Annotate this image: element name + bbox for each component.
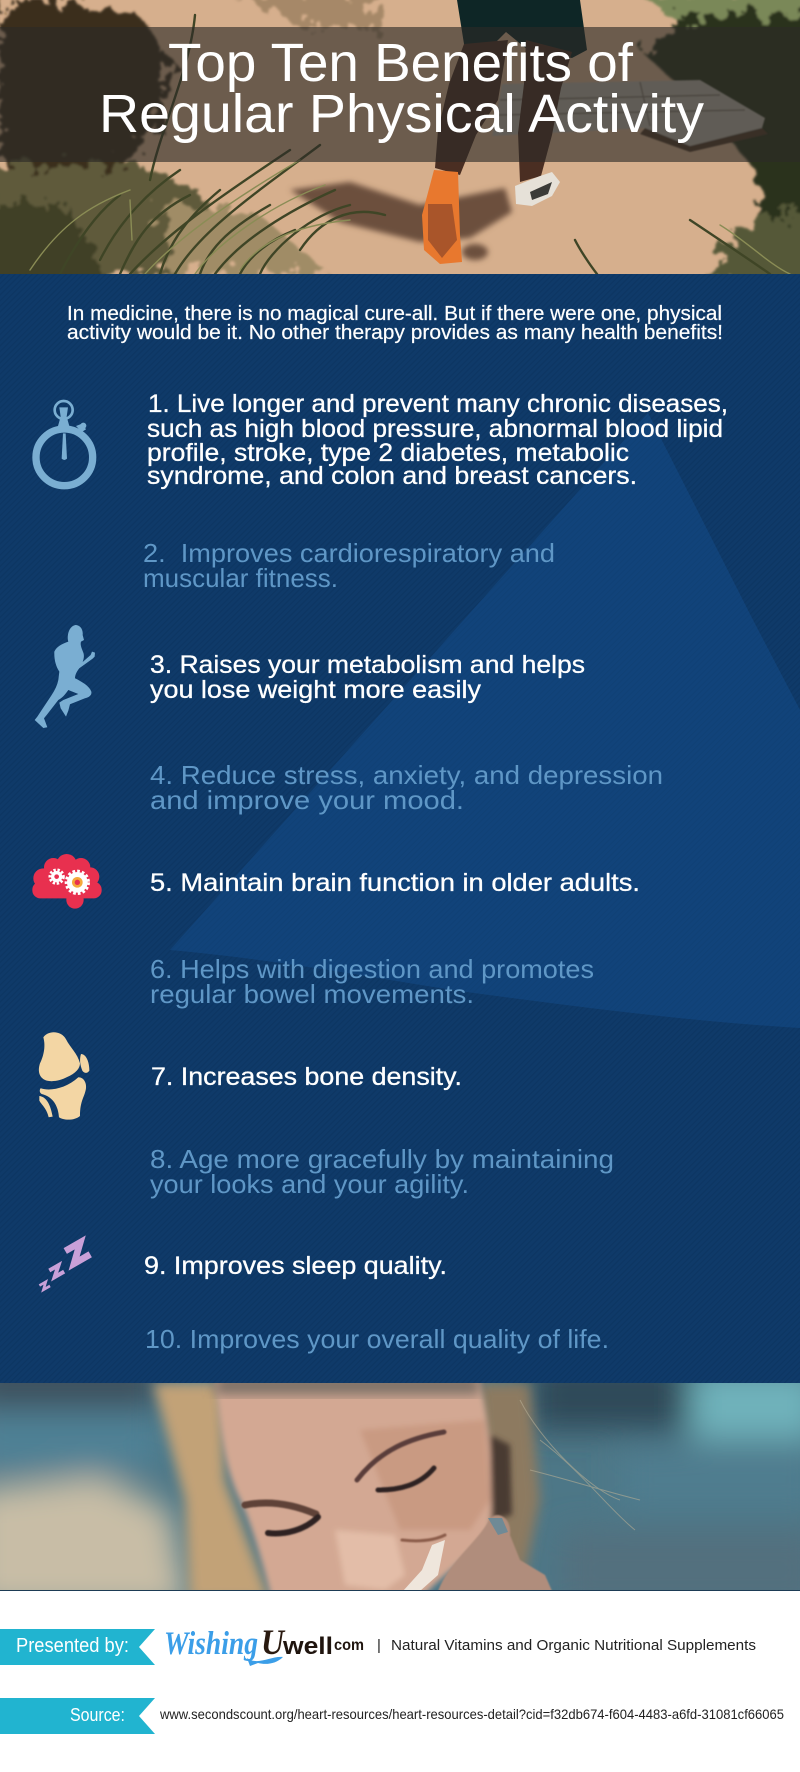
grass blades	[30, 15, 790, 274]
panel: blue benefits panel	[0, 274, 800, 1383]
benefit 1: such as high blood pressure, abnormal blood lipid	[147, 415, 723, 443]
ribbon: presented by	[0, 1629, 155, 1665]
icon: sleep zzz	[39, 1241, 90, 1290]
benefit 3: you lose weight more easily	[150, 676, 482, 704]
benefit 6: 6. Helps with digestion and promotes	[150, 954, 594, 984]
benefit 5: 5. Maintain brain function in older adults.	[150, 869, 640, 897]
logo: WishingUwell.com: com	[334, 1637, 364, 1654]
benefit 1: 1. Live longer and prevent many chronic diseases,	[148, 390, 728, 418]
benefit 4: 4. Reduce stress, anxiety, and depression	[150, 760, 663, 790]
intro text: activity would be it. No other therapy provides as many health benefits!	[67, 322, 723, 344]
benefit 10: 10. Improves your overall quality of life.	[145, 1324, 609, 1354]
tagline: |	[377, 1637, 381, 1654]
tagline: Natural Vitamins and Organic Nutritional Supplements	[391, 1637, 756, 1654]
hero photo: runner on sandy path	[0, 0, 800, 290]
benefit 6	[150, 954, 594, 1009]
background triangle shape	[170, 413, 800, 1028]
ribbon: source	[0, 1698, 155, 1734]
benefit 3: 3. Raises your metabolism and helps	[150, 651, 585, 679]
icon: knee joint	[39, 1032, 89, 1120]
benefit 9: 9. Improves sleep quality.	[144, 1252, 447, 1280]
benefit 1	[147, 390, 728, 490]
benefit 7: 7. Increases bone density.	[151, 1063, 462, 1091]
title: Regular Physical Activity	[99, 84, 704, 144]
shorts	[457, 0, 587, 58]
boardwalk planks	[492, 80, 768, 152]
benefit 2	[143, 538, 555, 593]
benefit 4	[150, 760, 663, 815]
benefit 8: 8. Age more gracefully by maintaining	[150, 1144, 614, 1174]
legs	[435, 40, 508, 175]
title band	[0, 27, 800, 162]
benefit 4: and improve your mood.	[150, 785, 464, 815]
icon: stopwatch	[36, 401, 93, 486]
title: Top Ten Benefits of	[168, 33, 634, 93]
benefit 8	[150, 1144, 614, 1199]
logo: WishingUwell.com: Wishing	[164, 1626, 258, 1662]
benefit 1: syndrome, and colon and breast cancers.	[147, 462, 637, 490]
benefit 2: muscular fitness.	[143, 563, 338, 593]
panel: footer	[0, 1592, 800, 1772]
right shoe	[515, 172, 560, 206]
benefit 2: 2. Improves cardiorespiratory and	[143, 538, 555, 568]
intro text: In medicine, there is no magical cure-all. But if there were one, physical	[67, 303, 722, 325]
title	[99, 33, 704, 144]
icon: runner	[35, 625, 95, 728]
benefit 8: your looks and your agility.	[150, 1169, 469, 1199]
ribbon: source: Source:	[70, 1705, 125, 1725]
ribbon: presented by: Presented by:	[16, 1635, 129, 1657]
benefit 6: regular bowel movements.	[150, 979, 474, 1009]
intro text	[67, 303, 723, 344]
left shoe	[422, 170, 462, 264]
logo: WishingUwell.com	[164, 1622, 364, 1666]
icon: brain with gears	[32, 854, 102, 909]
photo: smiling woman	[0, 1383, 800, 1591]
logo: WishingUwell.com: well	[282, 1633, 333, 1660]
benefit 1: profile, stroke, type 2 diabetes, metabolic	[147, 439, 629, 467]
benefit 3	[150, 651, 585, 704]
logo: WishingUwell.com: U	[261, 1622, 286, 1662]
